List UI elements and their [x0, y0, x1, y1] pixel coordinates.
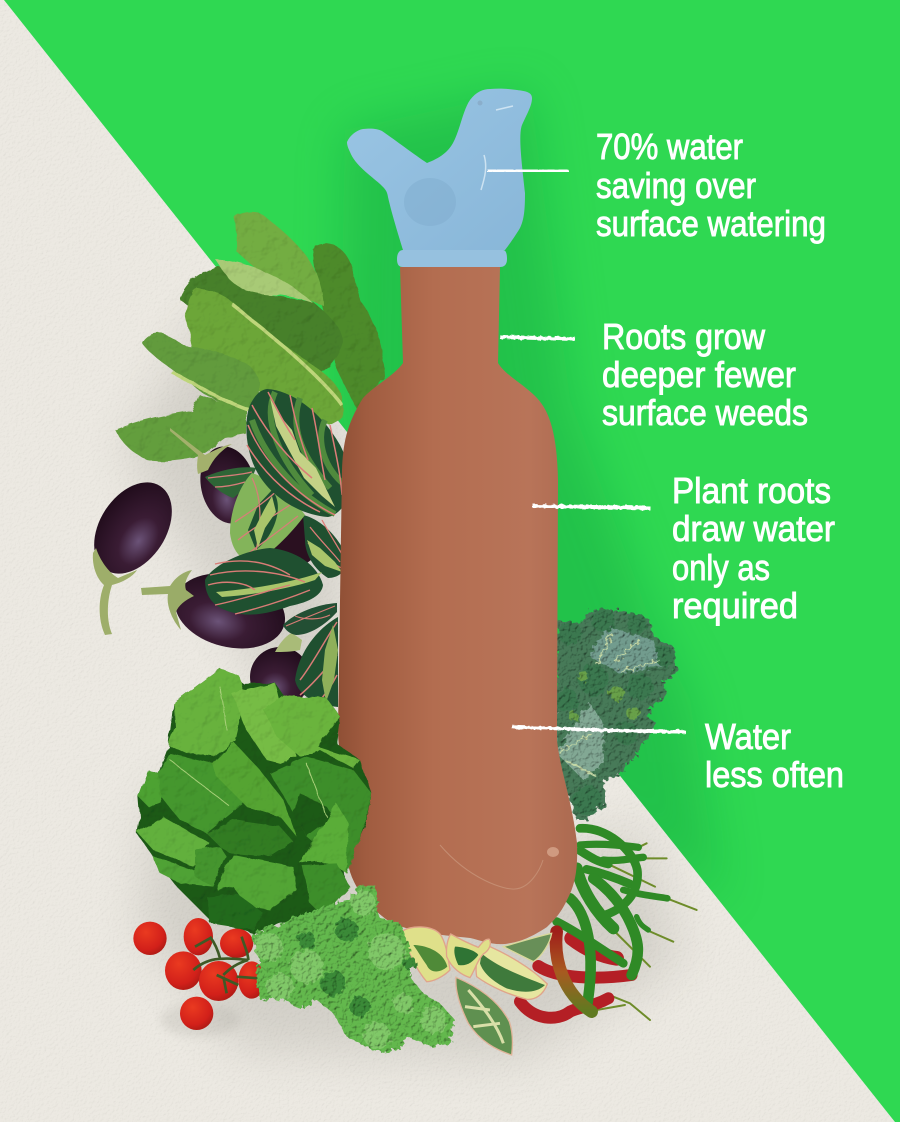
bird stopper [347, 89, 532, 267]
eggplant: centre [141, 563, 293, 659]
callout text: water saving [596, 126, 826, 244]
bird wing [404, 178, 456, 226]
lettuce: right lower bright [300, 803, 348, 873]
leaf: upper right [503, 933, 552, 962]
callout stroke: draw water [532, 506, 650, 508]
leaf: left [402, 927, 450, 982]
lettuce: mid-left leaf [158, 753, 243, 833]
romaine: left leaf [142, 333, 260, 411]
bottle crack and chip [440, 845, 559, 889]
callout text: draw water [672, 470, 835, 626]
tomato shadow [160, 1003, 240, 1037]
lettuce: bottom dark [207, 893, 263, 930]
lettuce: lower-left leaf [137, 817, 210, 867]
leaf: right [303, 515, 348, 578]
callout text: roots: deeper fewer [602, 354, 796, 395]
lettuce: upright leaf [232, 683, 297, 763]
callout text: roots: surface weeds [602, 392, 808, 433]
prayer plant leaves [205, 389, 352, 707]
callout stroke: water saving [487, 169, 568, 173]
lettuce: right leaf [270, 757, 372, 873]
kale: lower pale leaf [557, 703, 603, 780]
romaine: right leaf [312, 243, 385, 410]
leaf: right [476, 947, 547, 999]
bird collar [397, 250, 507, 267]
bird gloss [481, 106, 513, 190]
callout text: water saving: surface watering [596, 203, 826, 244]
eggplant calyx: lower [275, 633, 302, 652]
callout text: draw water: draw water [672, 508, 835, 549]
eggplant: behind leaves [270, 514, 320, 566]
bird body [347, 89, 532, 250]
lettuce: deep core [293, 793, 333, 837]
lettuce: middle dark [207, 820, 293, 857]
chillies [520, 828, 697, 1020]
eggplant: upper [193, 441, 263, 529]
leaf: bottom [295, 617, 338, 707]
callout text: water less: Water [705, 716, 791, 757]
leaf: small lower [283, 603, 337, 635]
tomato vine [193, 937, 258, 993]
eggplants [78, 428, 320, 707]
callout text: water less: less often [705, 754, 844, 795]
leaf: large [246, 389, 352, 517]
lettuce: centre lower leaf [195, 847, 227, 887]
romaine: top leaf [235, 212, 323, 305]
variegated leaves [402, 927, 552, 1055]
leaf: lower wide [205, 548, 323, 615]
kale: upper pale leaf [590, 627, 663, 673]
leaf: light middle [230, 473, 305, 563]
lettuce: lower leaf [153, 857, 213, 887]
kale [555, 608, 677, 820]
soft shade on green around the bottle [340, 90, 720, 900]
butterhead lettuce [137, 668, 372, 933]
callout stroke: roots [500, 337, 575, 339]
callout text: draw water: only as [672, 547, 770, 588]
leaf: small upper [205, 467, 256, 498]
leaf: bottom [456, 977, 512, 1055]
red-orange chilli [556, 932, 592, 1012]
terracotta bottle [338, 267, 577, 944]
romaine: central leaf [185, 288, 343, 425]
leaf: middle [446, 934, 490, 978]
romaine: ribs [172, 304, 342, 410]
lettuce: base [137, 668, 372, 933]
red chillies [520, 938, 632, 1018]
romaine: bottom leaf [115, 395, 247, 461]
cherry tomatoes [133, 918, 265, 1037]
lettuce: far-left leaf [138, 770, 162, 808]
eggplant: lower [250, 647, 310, 707]
romaine lettuce [115, 212, 385, 461]
lettuce: centre leaf [212, 742, 297, 837]
callout stroke: water less [512, 727, 686, 732]
callout text: draw water: Plant roots [672, 470, 831, 511]
eggplant calyx: upper [170, 428, 232, 474]
chilli stems [597, 843, 697, 1020]
green chillies [557, 828, 667, 1008]
soft shade on paper around the produce [125, 300, 680, 1060]
callout text: draw water: required [672, 585, 798, 626]
callout text: roots: Roots grow [602, 316, 766, 357]
callout text: water saving: saving over [596, 165, 756, 206]
cilantro [252, 887, 455, 1052]
kale: mass [555, 610, 677, 820]
callout text: water saving: 70% water [596, 126, 743, 167]
callout text: water less [705, 716, 844, 795]
lettuce: top-left leaf [168, 668, 245, 757]
eggplant: left [78, 468, 188, 635]
romaine: pale fold [215, 259, 313, 303]
lettuce: right-top leaf [263, 695, 360, 768]
cilantro: mass [252, 887, 455, 1052]
romaine: dark middle leaf [180, 266, 343, 372]
callout text: roots [602, 316, 808, 433]
